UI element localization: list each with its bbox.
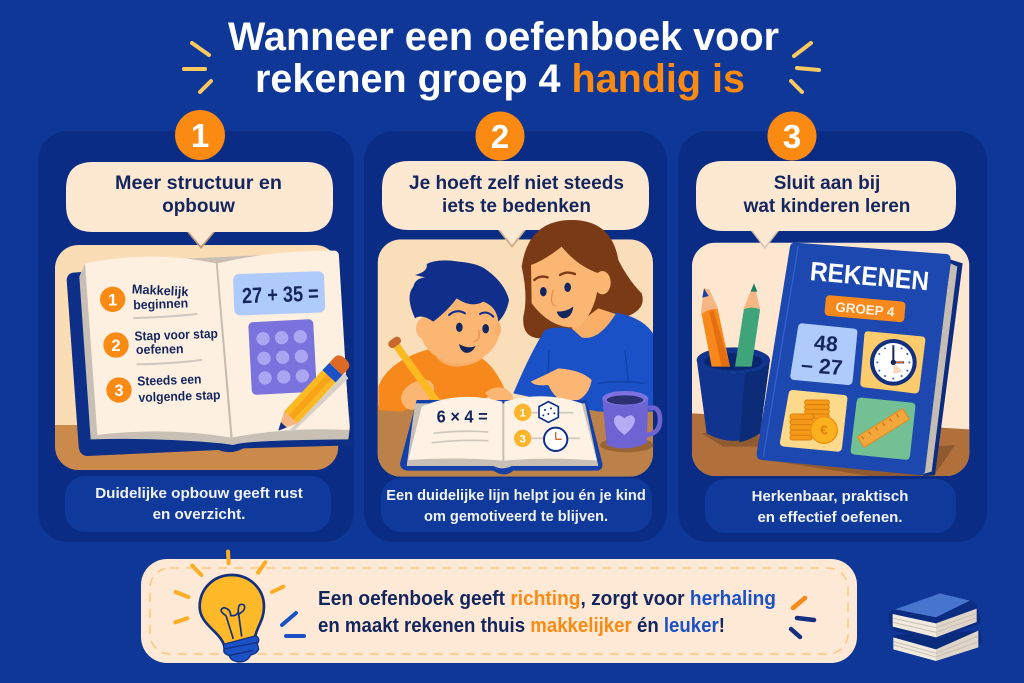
badge: number 1	[175, 110, 225, 160]
speech bubble: heading: Sluit aan bij	[774, 173, 880, 194]
list item 3: volgende stap	[138, 387, 221, 405]
sum card: 27 + 35 =	[242, 281, 319, 308]
panel: step 1	[38, 131, 354, 542]
icon: pencil	[272, 353, 352, 437]
caption: Duidelijke opbouw geeft rust	[95, 485, 303, 502]
callout banner	[141, 552, 857, 663]
speech bubble: heading	[382, 161, 649, 248]
list item 1: Makkelijk	[132, 281, 190, 299]
badge: number 2	[476, 112, 524, 160]
panel: step 3	[678, 131, 987, 542]
speech bubble: heading: Je hoeft zelf niet steeds	[409, 173, 624, 194]
illustration: rekenen book and pencil pot	[692, 243, 969, 477]
book cover: REKENEN	[809, 256, 930, 296]
title: Wanneer een oefenboek voor	[228, 15, 779, 59]
icon: right accent strokes	[791, 598, 814, 637]
book cover: GROEP 4	[835, 299, 896, 320]
list item 3: Steeds een	[137, 371, 202, 389]
badge: number 1: 1	[191, 117, 209, 154]
dot card	[248, 319, 317, 395]
icon: stack of books	[888, 593, 982, 661]
list item 1: 1	[108, 290, 117, 309]
book cover: – 27	[800, 353, 844, 380]
list item 1: beginnen	[133, 295, 188, 312]
badge: number 2: 2	[491, 118, 509, 155]
child	[378, 260, 513, 412]
open book: 3	[520, 433, 526, 445]
open book: 6 × 4 =	[437, 407, 488, 427]
sum card	[233, 271, 325, 316]
caption	[65, 476, 331, 532]
speech bubble: heading: opbouw	[162, 196, 235, 217]
list item 2: Stap voor stap	[134, 326, 218, 344]
list item 1	[100, 281, 197, 318]
icon: right title sparks	[791, 43, 819, 92]
badge: number 3: 3	[783, 118, 801, 155]
illustration: parent and child with workbook	[378, 220, 660, 474]
caption: en overzicht.	[153, 506, 245, 523]
list item 2: oefenen	[136, 341, 184, 357]
caption: Een duidelijke lijn helpt jou én je kind	[386, 488, 646, 504]
list item 2	[103, 326, 218, 364]
caption: Herkenbaar, praktisch	[752, 488, 908, 505]
callout text: Een oefenboek geeft richting, zorgt voor herhaling	[318, 588, 776, 610]
caption	[705, 479, 956, 533]
open book: 1	[520, 408, 526, 420]
caption: om gemotiveerd te blijven.	[424, 509, 608, 525]
speech bubble: heading	[66, 162, 333, 249]
icon: left title sparks	[184, 43, 211, 92]
parent	[513, 220, 653, 412]
open book	[400, 396, 602, 474]
book cover: 48	[813, 331, 839, 357]
list item 3: 3	[114, 381, 124, 400]
book cover: €	[820, 423, 828, 438]
title	[228, 15, 779, 101]
speech bubble: heading: wat kinderen leren	[743, 196, 910, 217]
callout text	[318, 588, 776, 637]
panel: step 2	[364, 131, 667, 542]
pencil pot	[697, 283, 770, 442]
speech bubble: heading	[696, 161, 956, 249]
badge: number 3	[768, 112, 816, 160]
icon: light bulb	[175, 552, 283, 662]
caption	[381, 478, 652, 532]
illustration background	[378, 239, 653, 477]
speech bubble: heading: Meer structuur en	[115, 173, 282, 194]
illustration: open workbook	[55, 245, 354, 472]
book back and pages	[923, 259, 963, 476]
caption: en effectief oefenen.	[757, 509, 903, 526]
mug	[600, 391, 660, 452]
speech bubble: heading: iets te bedenken	[442, 196, 591, 217]
title: rekenen groep 4 handig is	[255, 57, 745, 101]
icon: left accent strokes	[282, 613, 304, 636]
book cover	[757, 243, 951, 475]
callout text: en maakt rekenen thuis makkelijker én leuker!	[318, 615, 725, 637]
list item 2: 2	[111, 336, 121, 355]
list item 3	[106, 371, 221, 405]
